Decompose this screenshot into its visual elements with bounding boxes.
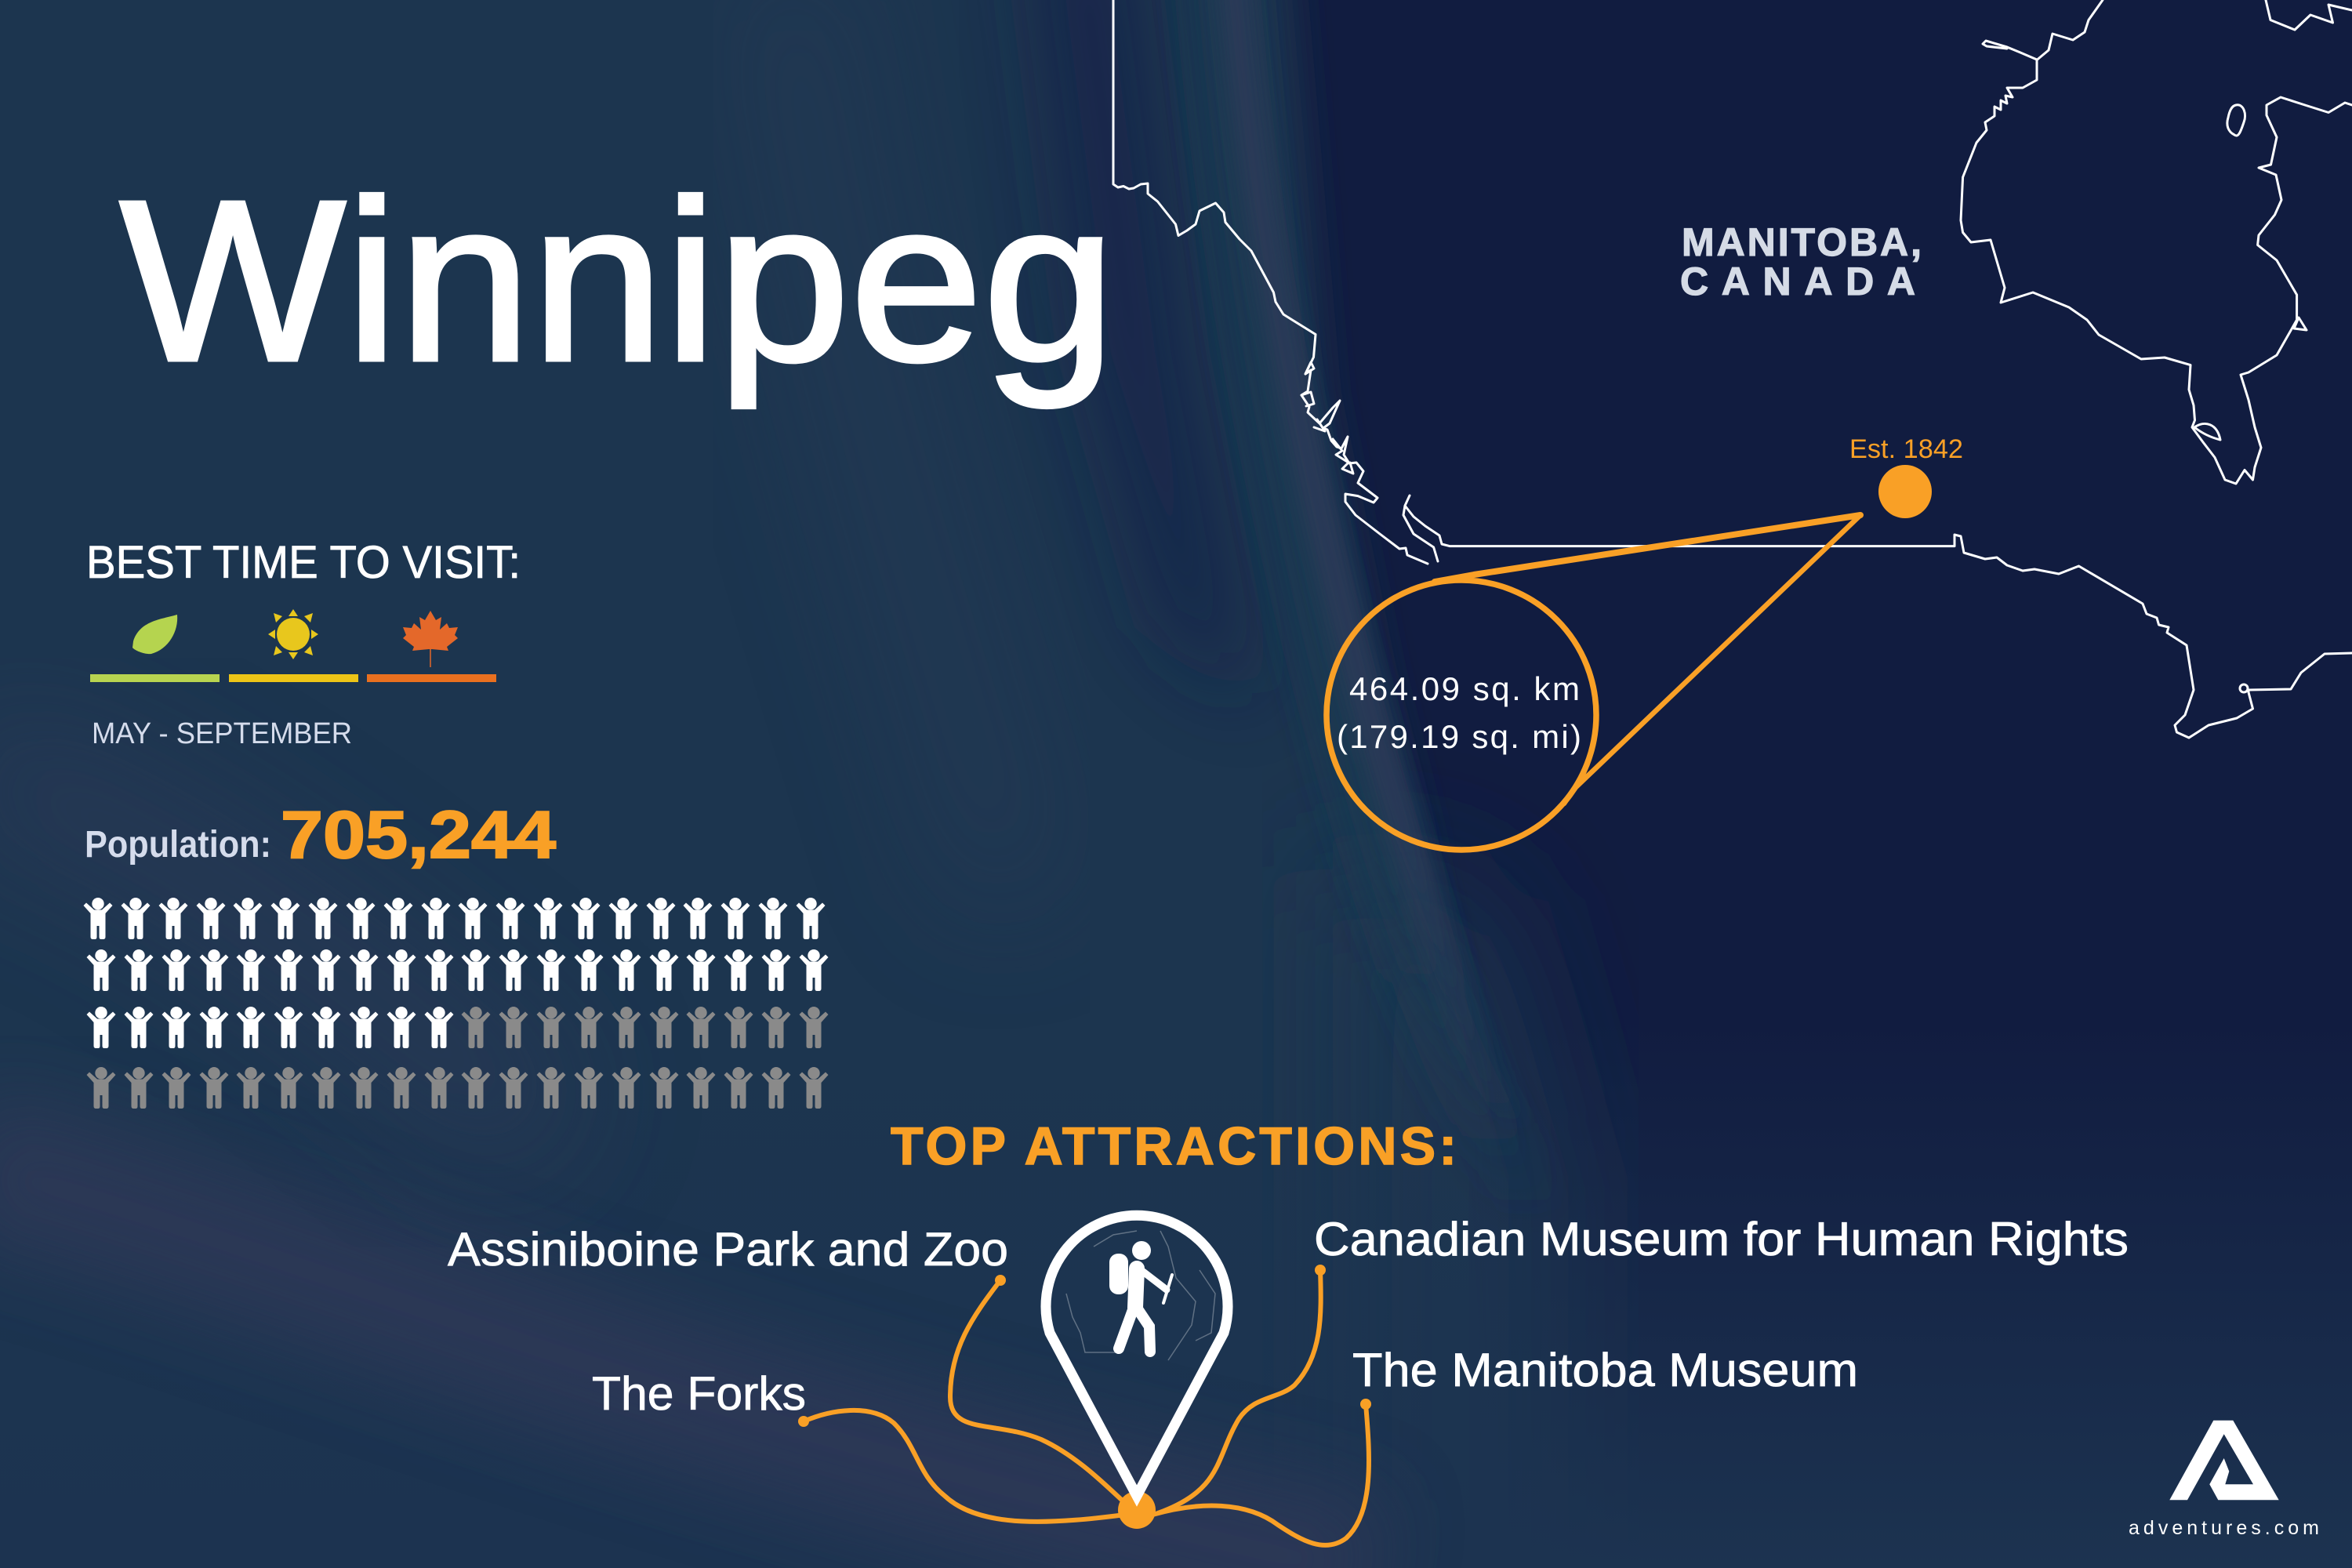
logo: adventures.com (2129, 1421, 2319, 1539)
icon: spring leaf (132, 615, 177, 654)
attraction labels: The Manitoba Museum (1352, 1344, 1858, 1396)
map: west coast islands detail (1301, 362, 1353, 474)
attraction labels (448, 1213, 2129, 1420)
label: Manitoba, Canada: CANADA (1680, 260, 1915, 303)
route: Canadian Museum (1158, 1270, 1321, 1513)
pin outline (1046, 1215, 1228, 1496)
attraction labels: The Forks (592, 1367, 806, 1420)
route: Manitoba Museum (1152, 1404, 1369, 1545)
attraction labels: Canadian Museum for Human Rights (1314, 1213, 2129, 1265)
attraction labels: Assiniboine Park and Zoo (448, 1223, 1008, 1276)
hub dot (1118, 1491, 1156, 1529)
callout text: (179.19 sq. mi) (1337, 718, 1581, 755)
bar: summer (229, 674, 358, 682)
map: island (2227, 105, 2245, 136)
hiker figure (1109, 1241, 1172, 1352)
callout pointer upper (1435, 515, 1860, 582)
label: Manitoba, Canada: MANITOBA, (1682, 220, 1922, 264)
callout pointer lower (1564, 515, 1860, 804)
marker: Winnipeg location (1878, 465, 1932, 518)
icon: location pin with hiker (1046, 1215, 1228, 1496)
routes: orange paths linking attractions (798, 1265, 1371, 1545)
label: established year: Est. 1842 (1849, 434, 1963, 464)
bar: spring (90, 674, 220, 682)
callout text (1337, 670, 1581, 755)
icon: autumn maple leaf (403, 611, 458, 667)
route endpoint dots (798, 1265, 1371, 1427)
callout circle (1327, 580, 1596, 850)
logo mark (2169, 1421, 2279, 1500)
heading: top attractions: TOP ATTRACTIONS: (891, 1116, 1457, 1176)
map: top right coast (2266, 0, 2352, 30)
panel: population (83, 798, 828, 1109)
people row 1 (83, 898, 825, 939)
people row 3 (86, 1007, 828, 1048)
icon: summer sun (268, 609, 318, 659)
heading: best time to visit: BEST TIME TO VISIT: (86, 537, 521, 588)
title: Winnipeg (120, 153, 1116, 410)
number: population value: 705,244 (281, 798, 556, 873)
label: population: Population: (85, 824, 271, 866)
route: The Forks (804, 1410, 1137, 1522)
map: small lake marker (2240, 684, 2248, 692)
pin faint map (1066, 1231, 1215, 1360)
map: lake (2194, 423, 2220, 440)
route: Assiniboine Park (950, 1280, 1132, 1509)
people row 4 (86, 1067, 828, 1109)
label: Manitoba, Canada (1680, 220, 1922, 303)
pictogram: population people grid (83, 898, 828, 1109)
panel: best time to visit (86, 537, 521, 750)
map: Canada outline (1113, 0, 2352, 738)
logo wordmark: adventures.com (2129, 1517, 2319, 1539)
bar: autumn (367, 674, 496, 682)
map: Hudson Bay coast (1961, 0, 2352, 484)
map: west coast and southern border (1113, 0, 2352, 738)
text: months: MAY - SEPTEMBER (92, 717, 352, 750)
callout text: 464.09 sq. km (1349, 670, 1580, 707)
people row 2 (86, 949, 828, 991)
callout: city area (1327, 515, 1860, 850)
